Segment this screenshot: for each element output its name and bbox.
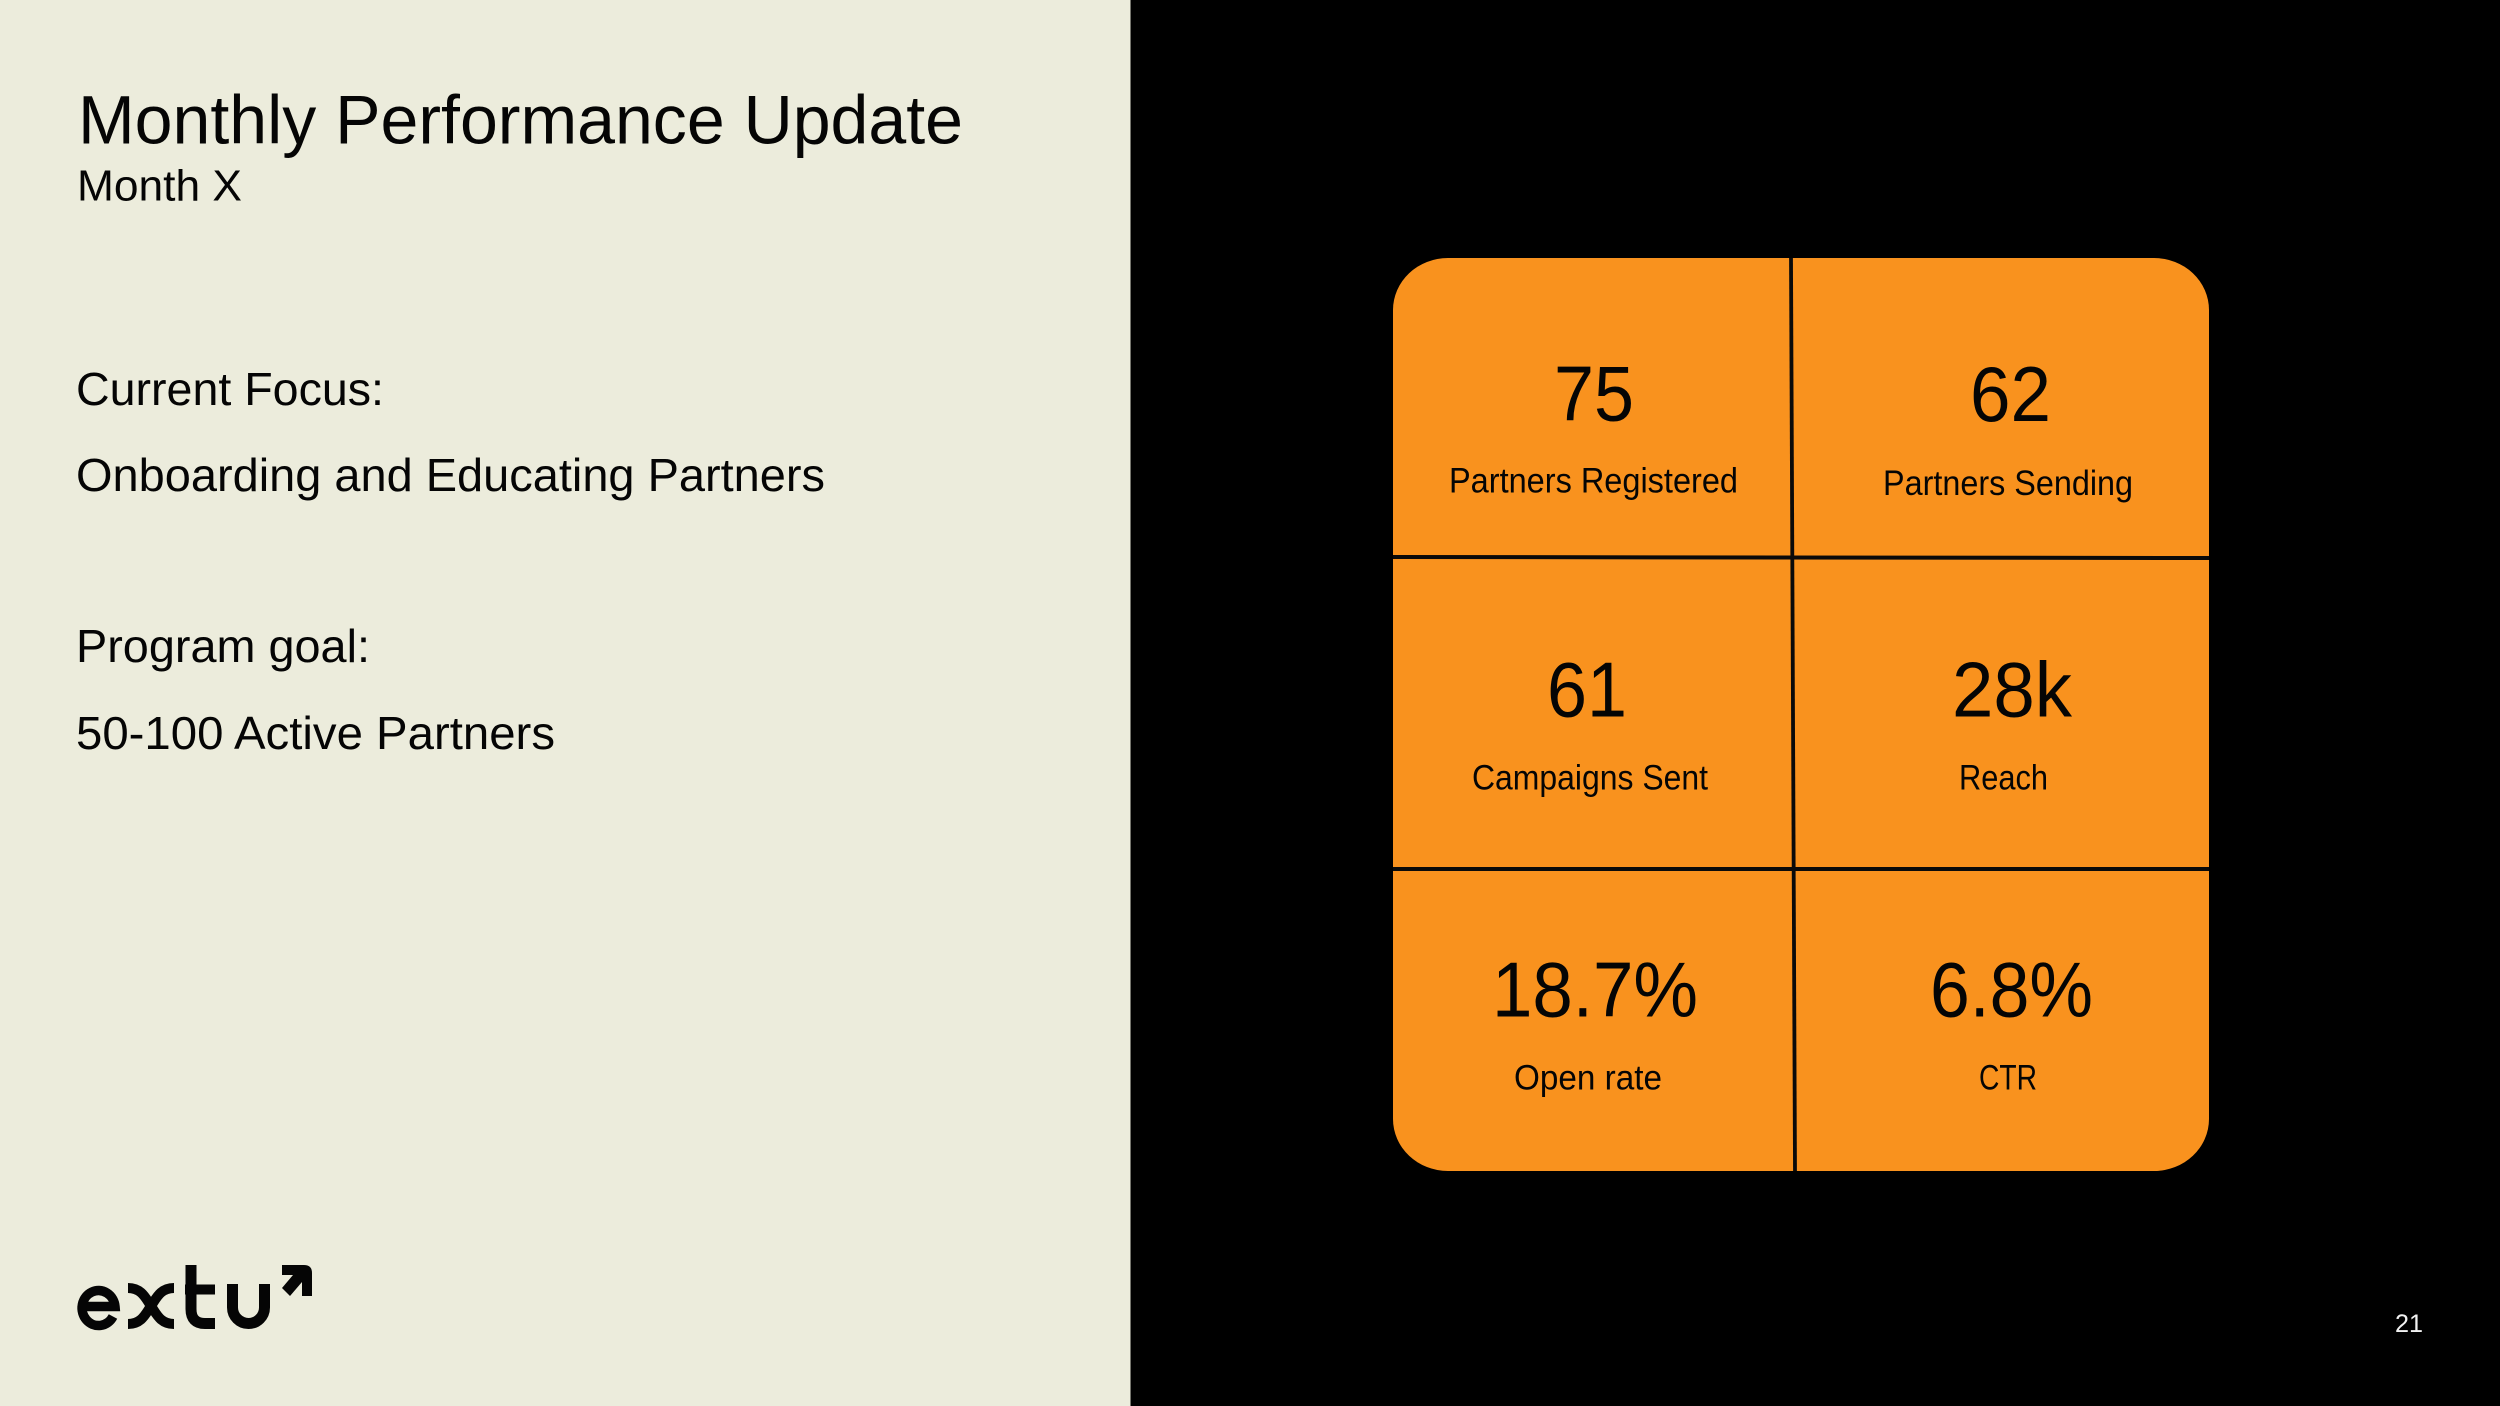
KPI: reach: 28k	[1952, 646, 2073, 734]
panel: orange KPI grid	[1393, 258, 2209, 1171]
KPI: partners registered: 75	[1554, 350, 1634, 438]
page number: 21	[2395, 1310, 2423, 1338]
text block: program goal	[76, 620, 555, 759]
text block: current focus: Current Focus:	[76, 363, 384, 415]
KPI: CTR	[1930, 946, 2093, 1098]
KPI: reach	[1952, 646, 2073, 798]
text block: current focus: Onboarding and Educating Partners	[76, 449, 825, 501]
subtitle: month: Month X	[77, 162, 242, 210]
title: Monthly Performance Update	[78, 82, 963, 158]
grid divider: lower horizontal	[1393, 867, 2209, 871]
grid divider: upper horizontal	[1393, 557, 2209, 558]
panel: left cream text panel	[0, 0, 1130, 1406]
text block: program goal: Program goal:	[76, 620, 370, 672]
KPI: partners registered	[1449, 350, 1738, 500]
logo: extu with arrow	[82, 1265, 312, 1326]
text block: current focus	[76, 363, 825, 501]
KPI: CTR: CTR	[1979, 1058, 2037, 1098]
KPI: CTR: 6.8%	[1930, 946, 2093, 1034]
text block: program goal: 50-100 Active Partners	[76, 707, 555, 759]
KPI: partners sending: Partners Sending	[1883, 464, 2133, 503]
KPI: reach: Reach	[1959, 758, 2048, 798]
grid divider: vertical	[1791, 258, 1795, 1171]
KPI: partners sending: 62	[1970, 350, 2051, 438]
KPI: open rate: 18.7%	[1492, 946, 1698, 1034]
KPI: open rate: Open rate	[1514, 1058, 1662, 1098]
KPI: partners registered: Partners Registered	[1449, 462, 1738, 500]
KPI: campaigns sent: 61	[1547, 646, 1627, 734]
KPI: campaigns sent: Campaigns Sent	[1472, 758, 1708, 798]
KPI: partners sending	[1883, 350, 2133, 503]
KPI: campaigns sent	[1472, 646, 1708, 798]
KPI: open rate	[1492, 946, 1698, 1098]
